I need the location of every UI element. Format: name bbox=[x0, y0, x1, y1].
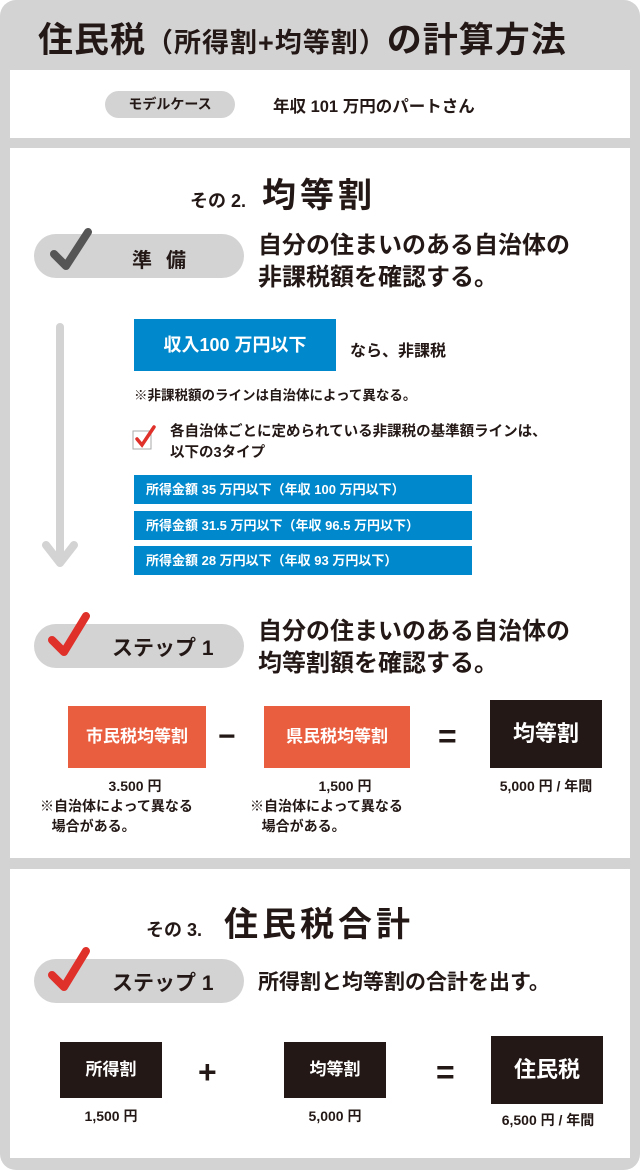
bars: three types: 所得金額 35 万円以下（年収 100 万円以下） bbox=[146, 482, 405, 497]
check note bbox=[132, 423, 547, 461]
icon: red check bbox=[48, 612, 90, 656]
box: 県民税均等割: 県民税均等割 bbox=[286, 727, 388, 746]
equation: 1,500 円 bbox=[319, 778, 371, 794]
equation: 5,000 円 bbox=[309, 1108, 361, 1124]
icon: checkbox bbox=[132, 425, 156, 450]
values: ※自治体によって異なる bbox=[40, 798, 193, 814]
text: step1: 均等割額を確認する。 bbox=[258, 650, 498, 677]
box: 県民税均等割 bbox=[264, 706, 410, 768]
equation bbox=[40, 700, 602, 834]
box: income bbox=[134, 319, 336, 371]
box: 均等割: 均等割 bbox=[513, 721, 579, 746]
pill: step1 bbox=[34, 612, 244, 668]
box: 住民税 bbox=[491, 1036, 603, 1104]
values: 場合がある。 bbox=[52, 818, 136, 834]
pill: step1: ステップ 1 bbox=[112, 972, 214, 995]
label: model case bbox=[105, 91, 235, 118]
box: 市民税均等割 bbox=[68, 706, 206, 768]
icon: grey check bbox=[50, 228, 92, 270]
box: 市民税均等割: 市民税均等割 bbox=[86, 727, 188, 746]
pill: step1: ステップ 1 bbox=[112, 637, 214, 660]
equation: ※自治体によって異なる bbox=[250, 798, 403, 814]
text: 非課税: なら、非課税 bbox=[350, 343, 446, 360]
text: model case: 年収 101 万円のパートさん bbox=[273, 98, 475, 116]
equation: = bbox=[438, 718, 457, 754]
pill: 準備 bbox=[34, 228, 244, 278]
values bbox=[40, 778, 193, 834]
text: 準備 bbox=[258, 232, 570, 291]
text: step1 bbox=[258, 618, 570, 677]
box: 均等割 bbox=[490, 700, 602, 768]
check note: 以下の3タイプ bbox=[170, 445, 265, 461]
pill: 準備: 準備 bbox=[132, 250, 200, 272]
box: 所得割: 所得割 bbox=[86, 1060, 136, 1079]
equation: 1,500 円 bbox=[85, 1108, 137, 1124]
panel: model case bbox=[10, 70, 630, 138]
box: 住民税: 住民税 bbox=[514, 1057, 580, 1082]
panel: 住民税合計 bbox=[10, 869, 630, 1158]
text: 準備: 自分の住まいのある自治体の bbox=[258, 232, 570, 259]
heading: その 3. 住民税合計 bbox=[146, 906, 414, 944]
box: 均等割: 均等割 bbox=[310, 1060, 360, 1079]
text: step1: 所得割と均等割の合計を出す。 bbox=[258, 971, 550, 994]
box: income: 収入100 万円以下 bbox=[163, 335, 307, 355]
equation bbox=[60, 1036, 603, 1128]
box: 均等割 bbox=[284, 1042, 386, 1098]
bars: three types bbox=[134, 475, 472, 575]
icon: red check bbox=[48, 947, 90, 991]
text: step1: 自分の住まいのある自治体の bbox=[258, 618, 570, 645]
heading: その 2. 均等割 bbox=[190, 177, 376, 215]
note: ※非課税額のラインは自治体によって異なる。 bbox=[134, 388, 416, 403]
check note: 各自治体ごとに定められている非課税の基準額ラインは、 bbox=[170, 424, 547, 440]
values: 3.500 円 bbox=[109, 778, 161, 794]
bars: three types: 所得金額 31.5 万円以下（年収 96.5 万円以下） bbox=[146, 518, 419, 533]
arrow: down bbox=[42, 323, 78, 567]
equation: 場合がある。 bbox=[262, 818, 346, 834]
bars: three types: 所得金額 28 万円以下（年収 93 万円以下） bbox=[146, 553, 397, 568]
title: 住民税（所得割+均等割）の計算方法 bbox=[38, 21, 567, 60]
equation: 6,500 円 / 年間 bbox=[502, 1112, 594, 1128]
equation: 5,000 円 / 年間 bbox=[500, 778, 592, 794]
equation: + bbox=[198, 1054, 217, 1090]
equation: − bbox=[218, 720, 236, 753]
equation: = bbox=[436, 1054, 455, 1090]
box: 所得割 bbox=[60, 1042, 162, 1098]
pill: step1 bbox=[34, 947, 244, 1003]
text: 準備: 非課税額を確認する。 bbox=[258, 264, 498, 291]
label: model case: モデルケース bbox=[128, 96, 212, 112]
panel: 均等割 bbox=[10, 148, 630, 858]
